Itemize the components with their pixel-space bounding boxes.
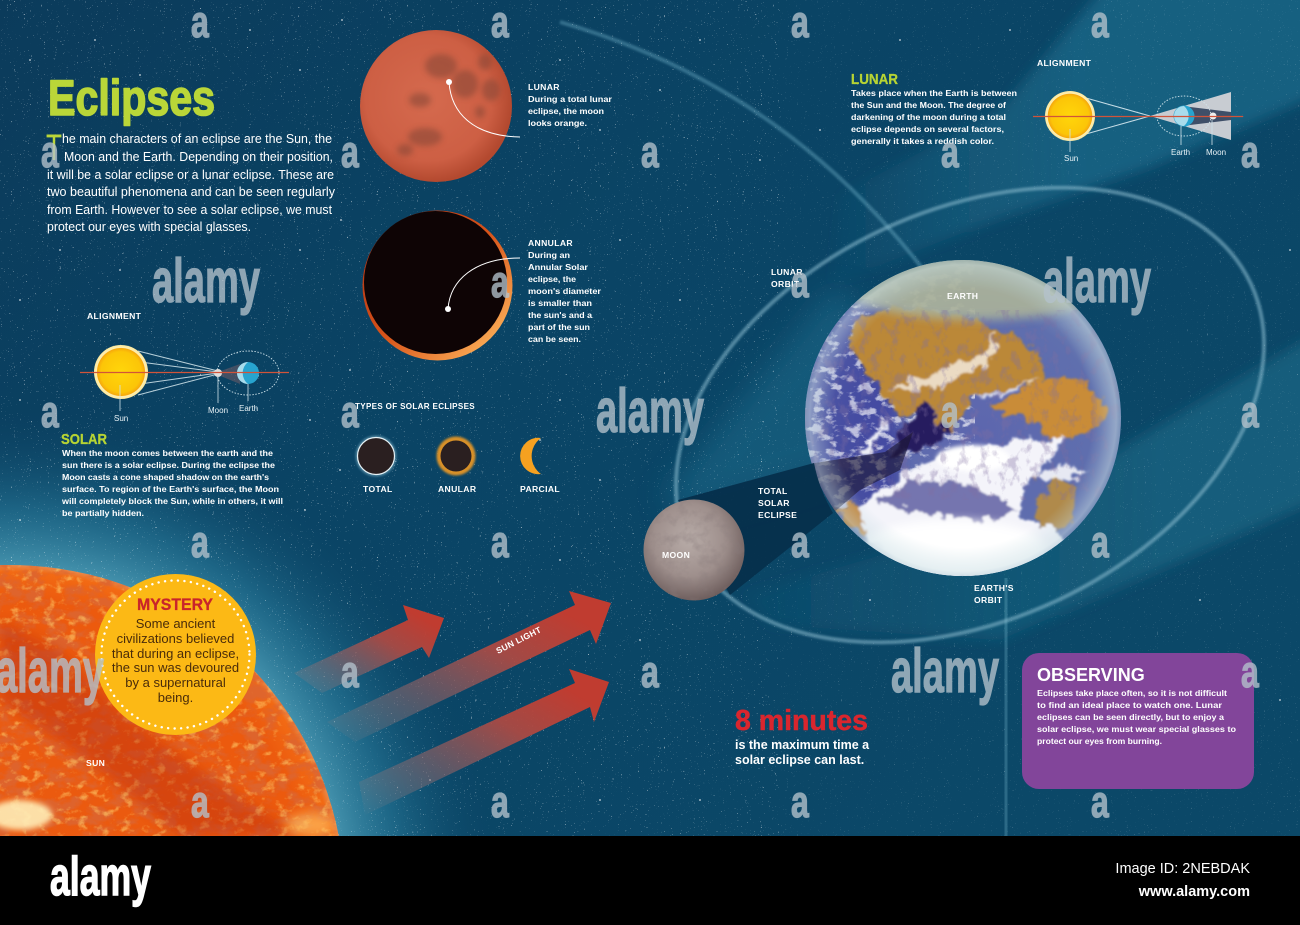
watermark: large words: alamy [596, 376, 704, 446]
clouds: bright bottom [860, 520, 1047, 580]
sun rays to moon [138, 351, 218, 395]
earth orbit dotted [217, 351, 279, 395]
panel: observing: eclipses can be seen directly, but to enjoy a [1037, 712, 1224, 722]
panel: observing: protect our eyes from burning. [1037, 736, 1162, 746]
earth [237, 362, 259, 384]
sun light label: SUN LIGHT [494, 624, 543, 656]
land: asia [850, 307, 1043, 435]
watermark: small letters: a [641, 128, 659, 177]
watermark: small letters: a [791, 778, 809, 827]
watermark: small letters: a [1091, 518, 1109, 567]
labels: Sun, Moon, Earth: Earth [239, 404, 258, 413]
labels: Sun, Moon, Earth: Sun [114, 414, 128, 423]
sun [94, 345, 148, 399]
lunar label: eclipse, the moon [528, 106, 604, 116]
annular label: During an [528, 250, 570, 260]
lunar eclipse moon photo [360, 30, 520, 182]
earth's orbit label [974, 583, 1014, 605]
watermark: large words [0, 246, 1151, 706]
surface texture [805, 310, 1121, 500]
axis line [80, 372, 289, 374]
solar text block [61, 431, 283, 518]
labels: Sun, Moon, Earth [114, 404, 258, 423]
land: south-west [833, 498, 868, 537]
total solar eclipse label [758, 486, 797, 520]
watermark: small letters: a [491, 258, 509, 307]
panel: observing: to find an ideal place to watch one. Lunar [1037, 700, 1223, 710]
labels: Sun, Earth, Moon: Sun [1064, 154, 1078, 163]
lunar orbit label: LUNAR [771, 267, 803, 277]
panel: observing: OBSERVING [1037, 665, 1145, 685]
footer logo: alamy [50, 845, 151, 907]
types of solar eclipses: TYPES OF SOLAR ECLIPSES [355, 401, 475, 411]
moon [214, 369, 222, 377]
lunar alignment diagram [1033, 58, 1243, 163]
light beam: lower right [852, 342, 1300, 638]
alignment label: ALIGNMENT [87, 311, 142, 321]
orbit: lunar orbit ellipse [602, 98, 1300, 732]
intro text block: from Earth. However to see a solar eclipse, we must [47, 202, 332, 217]
watermark: small letters: a [41, 128, 59, 177]
clouds: south [860, 437, 1070, 580]
lunar alignment diagram: ALIGNMENT [1037, 58, 1092, 68]
lunar text block: Takes place when the Earth is between [851, 88, 1017, 98]
mystery callout: being. [158, 690, 193, 705]
mystery callout: civilizations believed [117, 631, 234, 646]
annular label: eclipse, the [528, 274, 576, 284]
clouds: dark swirl [880, 480, 1017, 520]
arrow 1 [294, 605, 444, 693]
footer: black stock bar [0, 836, 1300, 925]
intro text block: Moon and the Earth. Depending on their position, [64, 149, 333, 164]
solar text block: sun there is a solar eclipse. During the eclipse the [62, 460, 275, 470]
icon: anular: ANULAR [438, 484, 477, 494]
intro text block: protect our eyes with special glasses. [47, 219, 251, 234]
title: Eclipses [48, 70, 215, 126]
moon shadow cone [218, 364, 240, 384]
annular label: moon's diameter [528, 286, 602, 296]
shadow on earth [814, 432, 913, 511]
sun texture [0, 560, 345, 836]
icon: total: TOTAL [363, 484, 393, 494]
labels: Sun, Earth, Moon: Moon [1206, 148, 1226, 157]
labels: Sun, Earth, Moon [1064, 148, 1226, 163]
watermark: small letters: a [341, 128, 359, 177]
annular label: is smaller than [528, 298, 592, 308]
continents [837, 307, 1110, 580]
watermark: small letters: a [1091, 778, 1109, 827]
watermark: small letters: a [791, 258, 809, 307]
watermark: small letters: a [1241, 388, 1259, 437]
watermark: small letters: a [1241, 648, 1259, 697]
solar text block: When the moon comes between the earth and the [62, 448, 273, 458]
light around the sun [0, 456, 444, 836]
lunar label [528, 82, 613, 128]
lunar maria [397, 54, 500, 156]
land: madagascar region [1031, 476, 1038, 482]
haze: north [854, 260, 1079, 326]
light beam: top right [882, 0, 1300, 251]
lunar text block [851, 71, 1017, 146]
solar text block: surface. To region of the Earth's surface, the Moon [62, 484, 279, 494]
mystery callout: the sun was devoured [112, 660, 239, 675]
8 minutes callout: solar eclipse can last. [735, 753, 864, 767]
footer url: www.alamy.com [1138, 884, 1250, 900]
8 minutes callout [735, 705, 870, 767]
icon: total [356, 436, 396, 494]
watermark: large words: alamy [891, 636, 999, 706]
watermark: small letters: a [641, 648, 659, 697]
lunar label: During a total lunar [528, 94, 613, 104]
watermark: small letters: a [191, 778, 209, 827]
icon: parcial [520, 438, 560, 494]
lunar text block: eclipse depends on several factors, [851, 124, 1004, 134]
earth [1174, 106, 1194, 126]
annular label: ANNULAR [528, 238, 573, 248]
solar text block: Moon casts a cone shaped shadow on the earth's [62, 472, 269, 482]
mystery callout: that during an eclipse, [112, 646, 239, 661]
moon shadow cone [678, 463, 833, 595]
lunar orbit label [771, 267, 803, 289]
orbit: vertical line below earth [1004, 578, 1008, 836]
watermark: small letters: a [1241, 128, 1259, 177]
watermark: large words: alamy [152, 246, 260, 316]
8 minutes callout: is the maximum time a [735, 738, 870, 752]
lunar text block: LUNAR [851, 71, 898, 88]
icon: anular [436, 436, 477, 494]
annular label: can be seen. [528, 334, 581, 344]
sun rays and shadow [1086, 98, 1150, 134]
annular label: part of the sun [528, 322, 590, 332]
earth's orbit label: EARTH'S [974, 583, 1014, 593]
panel: observing [1022, 653, 1254, 789]
annular eclipse photo [362, 210, 520, 360]
orbit dotted [1157, 96, 1211, 136]
watermark: small letters: a [791, 518, 809, 567]
intro text block: he main characters of an eclipse are the Sun, the [62, 131, 332, 146]
penumbra cone [1150, 92, 1231, 140]
land: africa and arabia [990, 380, 1110, 442]
icon: parcial: PARCIAL [520, 484, 560, 494]
annular label [528, 238, 602, 344]
ocean: speckled west [805, 300, 900, 520]
lunar label: LUNAR [528, 82, 560, 92]
watermark: small letters: a [191, 518, 209, 567]
labels: Sun, Moon, Earth: Moon [208, 406, 228, 415]
watermark: small letters: a [941, 128, 959, 177]
intro text block [46, 127, 335, 234]
types of solar eclipses [355, 401, 560, 494]
pointer line [449, 82, 520, 137]
star field: west [0, 0, 780, 836]
watermark: large words: alamy [1043, 246, 1151, 316]
sun label: SUN [86, 758, 105, 768]
orbit: earth's orbit arc [560, 22, 922, 268]
drop cap: T [46, 127, 62, 168]
orbit and eclipse labels [758, 267, 1014, 605]
arrows: sunlight [294, 591, 611, 815]
mystery callout: Some ancient [136, 616, 216, 631]
panel: observing: solar eclipse, we must wear special glasses to [1037, 724, 1236, 734]
mystery callout: MYSTERY [137, 595, 214, 614]
moon [644, 500, 744, 600]
watermark: small letters: a [491, 778, 509, 827]
total solar eclipse label: TOTAL [758, 486, 788, 496]
watermark: small letters: a [41, 388, 59, 437]
arrow 2 [327, 591, 611, 742]
annular label: Annular Solar [528, 262, 589, 272]
solar text block: be partially hidden. [62, 508, 144, 518]
moon label: MOON [662, 550, 690, 560]
earth label: EARTH [947, 291, 978, 301]
intro text block: it will be a solar eclipse or a lunar eclipse. These are [47, 167, 334, 182]
axis [1033, 116, 1243, 118]
light beam: behind moon [671, 294, 854, 500]
earth [805, 253, 1121, 580]
star field: east [780, 0, 1300, 836]
land: australia [1037, 480, 1080, 537]
annular label: the sun's and a [528, 310, 592, 320]
watermark: small letters: a [941, 388, 959, 437]
pointer line [448, 258, 520, 309]
lunar orbit label: ORBIT [771, 279, 800, 289]
panel: observing: Eclipses take place often, so it is not difficult [1037, 688, 1227, 698]
sun [1045, 91, 1095, 141]
lunar text block: generally it takes a reddish color. [851, 136, 994, 146]
lunar label: looks orange. [528, 118, 587, 128]
watermark: small letters: a [341, 388, 359, 437]
total solar eclipse label: SOLAR [758, 498, 790, 508]
watermark: small letters: a [341, 648, 359, 697]
intro text block: two beautiful phenomena and can be seen regularly [47, 184, 335, 199]
mystery callout: by a supernatural [125, 675, 226, 690]
arrow 3 [359, 669, 609, 815]
watermark: small letters: a [491, 518, 509, 567]
moon [1210, 112, 1216, 120]
labels: Sun, Earth, Moon: Earth [1171, 148, 1190, 157]
footer image id: Image ID: 2NEBDAK [1115, 861, 1250, 877]
mystery callout [95, 574, 256, 735]
8 minutes callout: 8 minutes [735, 705, 868, 737]
clouds: streaks [887, 333, 997, 390]
lunar text block: darkening of the moon during a total [851, 112, 1006, 122]
solar text block: SOLAR [61, 431, 107, 448]
lunar text block: the Sun and the Moon. The degree of [851, 100, 1006, 110]
solar alignment diagram [80, 311, 289, 423]
total solar eclipse label: ECLIPSE [758, 510, 797, 520]
sun [0, 560, 345, 837]
earth's orbit label: ORBIT [974, 595, 1003, 605]
solar text block: will completely block the Sun, while in others, it will [61, 496, 283, 506]
ocean: dark patch [887, 403, 948, 457]
